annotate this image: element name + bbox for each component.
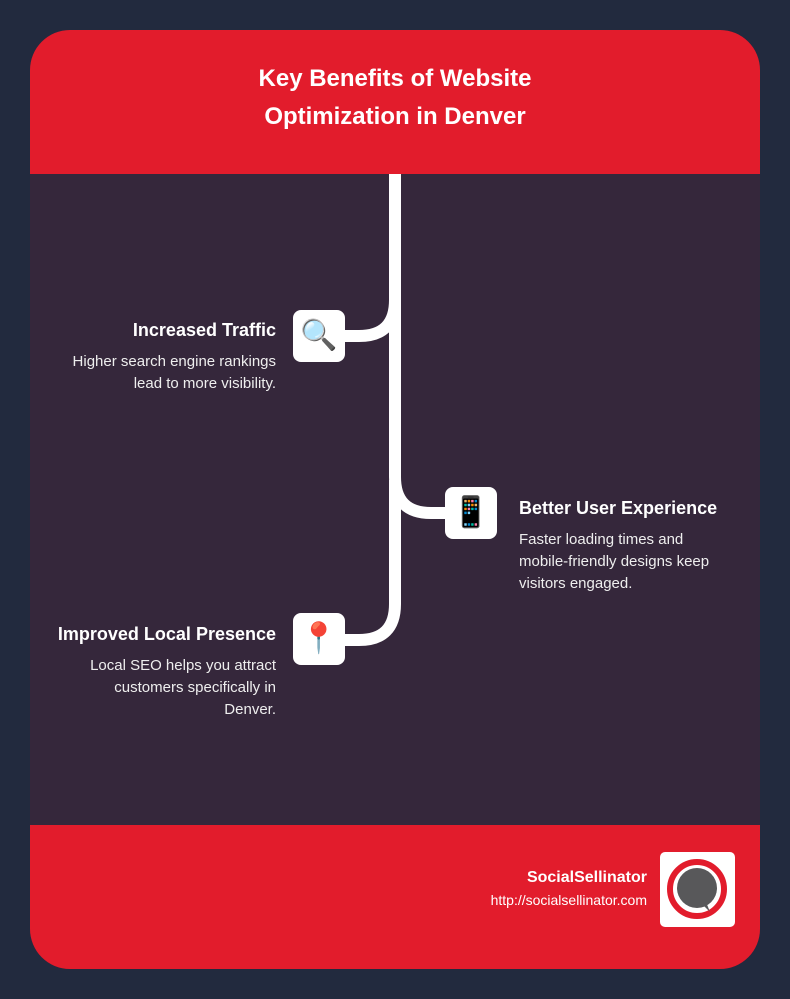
title: Optimization in Denver [264, 103, 526, 130]
brand text: http://socialsellinator.com [491, 892, 647, 908]
text: increased traffic [73, 320, 276, 392]
brand text [491, 869, 647, 908]
icon: pin: 📍 [300, 621, 338, 656]
text: increased traffic: Higher search engine rankings lead to more visibility. [73, 353, 276, 392]
icon: pin [293, 613, 345, 665]
text: better user experience: Faster loading times and mobile-friendly designs keep visitors engaged. [519, 531, 709, 592]
brand text: SocialSellinator [527, 869, 647, 886]
text: improved local presence: Local SEO helps you attract customers specifically in Denver. [90, 657, 276, 718]
icon: phone: 📱 [452, 495, 490, 530]
text: improved local presence: Improved Local Presence [58, 624, 276, 644]
text: improved local presence [58, 624, 276, 718]
logo [660, 852, 735, 927]
text: better user experience [519, 498, 717, 592]
text: better user experience: Better User Experience [519, 498, 717, 518]
icon: magnifier: 🔍 [300, 318, 338, 353]
icon: magnifier [293, 310, 345, 362]
icon: phone [445, 487, 497, 539]
title [30, 30, 760, 174]
text: increased traffic: Increased Traffic [133, 320, 276, 340]
footer [30, 825, 760, 969]
title: Key Benefits of Website [259, 65, 531, 92]
